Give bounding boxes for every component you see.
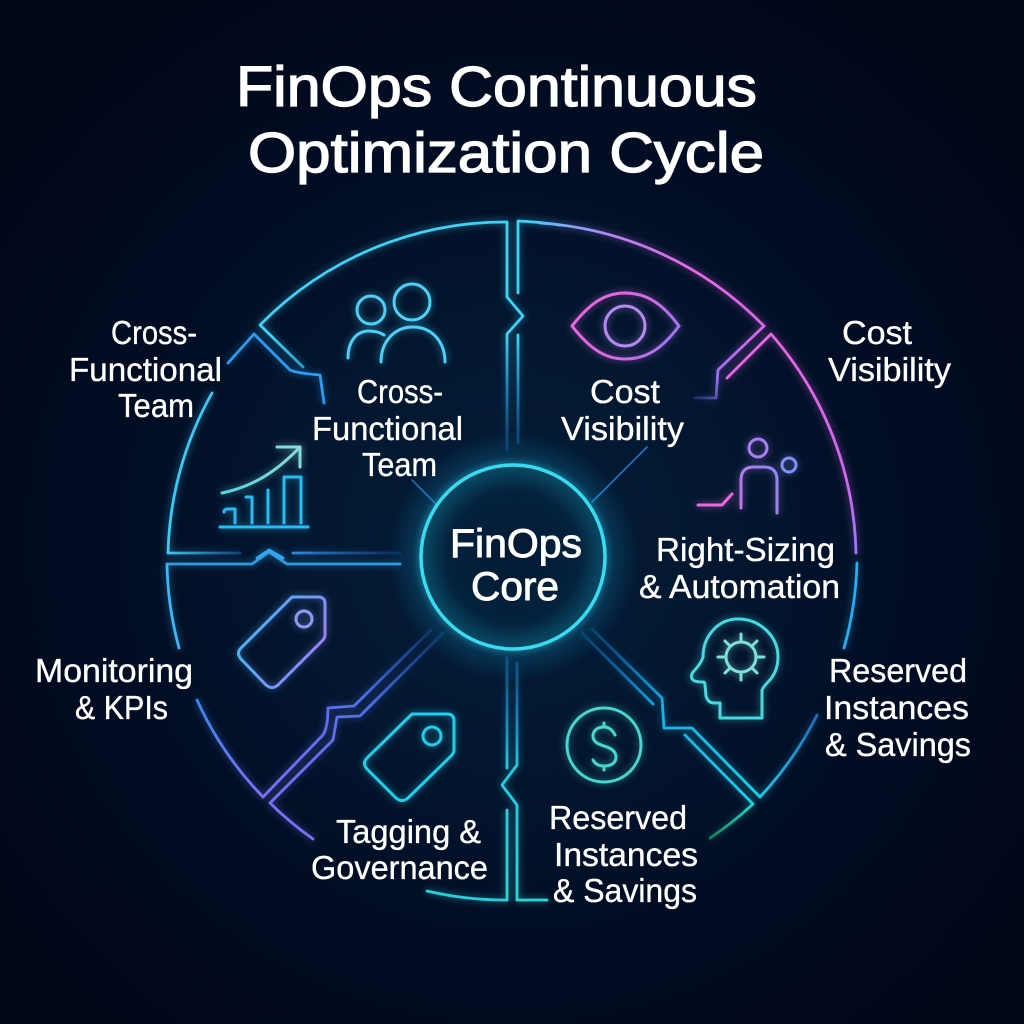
- title: [236, 55, 764, 185]
- label: right-sizing and automation: & Automation: [639, 568, 840, 605]
- spokes to core: [412, 447, 647, 503]
- segment outline: cross-functional team (top left): [228, 222, 523, 450]
- label: cost visibility, outer: [828, 314, 952, 388]
- segment outline: right-sizing and automation (right): [727, 334, 857, 648]
- label: reserved instances, outer: Instances: [824, 689, 969, 726]
- label: cross-functional team, outer: [69, 314, 222, 424]
- label: cross-functional team, inner: [312, 373, 463, 483]
- label: reserved instances, inner: Instances: [554, 836, 698, 873]
- cycle wheel: segmented ring and dividers: [167, 221, 857, 900]
- segment outline: left upper: [168, 393, 400, 558]
- label: reserved instances, outer: Reserved: [829, 652, 967, 689]
- segment outline: reserved instances, bottom: [502, 633, 753, 900]
- segment outline: monitoring and KPIs: [167, 552, 431, 797]
- icon: people: [348, 284, 445, 362]
- label: reserved instances, inner: Reserved: [549, 799, 687, 836]
- icon: dollar coin: [567, 708, 641, 782]
- title: Optimization Cycle: [248, 121, 764, 185]
- label: reserved instances, outer: & Savings: [825, 726, 971, 763]
- icon: person with automation: [698, 439, 796, 513]
- label: tagging and governance: Governance: [311, 849, 488, 886]
- label: reserved instances, inner: & Savings: [553, 872, 697, 909]
- icon: price tag, monitoring: [238, 597, 325, 688]
- icon: growth chart: [220, 447, 308, 527]
- label: cross-functional team, outer: Cross-: [111, 314, 197, 351]
- label: monitoring and KPIs: & KPIs: [75, 689, 168, 726]
- label: reserved instances, inner: [549, 799, 698, 909]
- label: right-sizing and automation: Right-Sizing: [656, 531, 835, 568]
- centre node: FinOps Core: FinOps: [450, 522, 582, 566]
- label: reserved instances, outer: [824, 652, 971, 763]
- label: monitoring and KPIs: [35, 652, 193, 726]
- icon: head with gear: [692, 619, 778, 718]
- label: cross-functional team, outer: Functional: [69, 351, 222, 388]
- label: tagging and governance: Tagging &: [336, 813, 481, 850]
- label: cross-functional team, outer: Team: [118, 387, 194, 424]
- label: cost visibility, inner: Visibility: [561, 410, 685, 447]
- label: cross-functional team, inner: Cross-: [357, 373, 443, 410]
- core glow: [388, 432, 638, 682]
- label: cost visibility, outer: Visibility: [828, 351, 952, 388]
- icon: price tag, governance: [364, 714, 454, 800]
- icon: eye: [572, 293, 679, 359]
- segment outline: reserved instances, right: [592, 629, 817, 797]
- label: cross-functional team, inner: Team: [362, 446, 437, 483]
- centre node: FinOps Core: [421, 465, 605, 649]
- segment outline: tagging and governance: [270, 633, 507, 900]
- label: monitoring and KPIs: Monitoring: [35, 652, 193, 689]
- label: cost visibility, outer: Cost: [842, 314, 912, 351]
- label: cost visibility, inner: [561, 373, 685, 447]
- centre node: FinOps Core: Core: [471, 565, 559, 609]
- label: right-sizing and automation: [639, 531, 840, 605]
- label: cross-functional team, inner: Functional: [312, 410, 463, 447]
- label: tagging and governance: [311, 813, 488, 886]
- label: cost visibility, inner: Cost: [590, 373, 660, 410]
- segment outline: cost visibility (top right): [518, 221, 764, 443]
- title: FinOps Continuous: [236, 55, 757, 119]
